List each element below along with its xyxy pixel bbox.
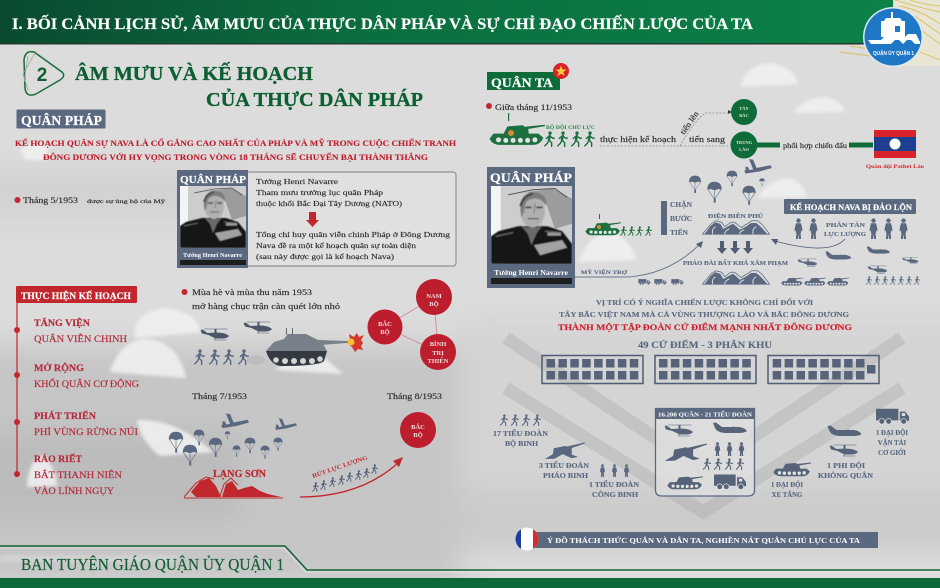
diagram: three target regions: BẮC <box>378 320 392 328</box>
arrow: withdrawal of forces: RÚT LỰC LƯỢNG <box>311 453 369 480</box>
icon: Vietnam flag <box>553 63 569 79</box>
banner: French intent: Ý ĐỒ THÁCH THỨC QUÂN VÀ DÂN TA, NGHIỀN NÁT QUÂN CHỦ LỰC CỦA TA <box>547 537 860 545</box>
block label: chặn bước tiến <box>661 201 692 237</box>
biography text: Nava đề ra một kế hoạch quân sự toàn diện <box>256 241 416 250</box>
logo: Quận ủy Quận 1 <box>840 0 940 67</box>
node: Tây Bắc: TÂY <box>739 106 749 111</box>
biography text <box>256 177 450 261</box>
unit: artillery: PHÁO BINH <box>543 472 589 480</box>
text: summer and autumn sweeps: mở hàng chục trận càn quét lớn nhỏ <box>192 301 340 311</box>
dates: July and August 1953: Tháng 8/1953 <box>387 392 442 401</box>
logo: Quận ủy Quận 1: QUẬN ỦY QUẬN 1 <box>873 50 914 57</box>
step: ráo riết <box>34 452 122 497</box>
arrow: down <box>306 212 319 227</box>
card: Navarre portrait <box>177 170 248 268</box>
step: tăng viện <box>34 316 127 345</box>
text: strategic position: TÂY BẮC VIỆT NAM MÀ CẢ VÙNG THƯỢNG LÀO VÀ BẮC ĐÔNG DƯƠNG <box>559 311 850 319</box>
illustration: Điện Biên Phủ: ĐIỆN BIÊN PHỦ <box>708 212 764 220</box>
unit: tanks <box>771 463 811 499</box>
arrow: US aid <box>575 241 703 285</box>
step: ráo riết: RÁO RIẾT <box>34 452 83 465</box>
red statement: Nava plan: KẾ HOẠCH QUÂN SỰ NAVA LÀ CỐ GẮNG CAO NHẤT CỦA PHÁP VÀ MỸ TRONG CUỘC CHIẾN TRANH <box>15 138 456 148</box>
biography text: Tham mưu trưởng lục quân Pháp <box>256 188 383 197</box>
node: Tây Bắc <box>731 99 757 125</box>
unit: engineers: CÔNG BINH <box>592 491 639 499</box>
unit: infantry <box>493 414 548 448</box>
date note: Tháng 5/1953: được sự ủng hộ của Mỹ <box>87 198 165 205</box>
unit: transport <box>876 409 909 457</box>
date note: Tháng 5/1953: Tháng 5/1953 <box>23 196 78 205</box>
diagram: three target regions: TRỊ <box>432 350 444 357</box>
section heading: 2 Âm mưu và kế hoạch: CỦA THỰC DÂN PHÁP <box>206 87 423 111</box>
heading: 49 strongholds: 49 CỨ ĐIỂM - 3 PHÂN KHU <box>638 338 772 351</box>
panel: garrison summary: 16.200 QUÂN - 21 TIỂU ĐOÀN <box>658 410 753 418</box>
label: Quân Pháp: QUÂN PHÁP <box>21 113 102 128</box>
unit: infantry: BỘ BINH <box>505 440 539 448</box>
footer: BAN TUYÊN GIÁO QUẬN ỦY QUẬN 1 <box>21 555 284 574</box>
diagram: three target regions: BỘ <box>380 328 390 336</box>
card: Navarre large portrait: QUÂN PHÁP <box>490 170 572 185</box>
header bar <box>0 0 940 66</box>
node: Tây Bắc: BẮC <box>739 112 749 118</box>
label: Quân ta with flag <box>487 63 569 90</box>
unit: air squadron: KHÔNG QUÂN <box>818 472 873 480</box>
unit: tanks: XE TĂNG <box>772 491 803 499</box>
date note: mid November 1953: Giữa tháng 11/1953 <box>495 103 572 112</box>
panel: garrison summary <box>655 408 755 496</box>
diagram: three target regions <box>368 279 456 370</box>
unit: air squadron <box>818 426 873 480</box>
diagram: three target regions: NAM <box>426 293 442 300</box>
step: tăng viện: TĂNG VIỆN <box>34 316 90 329</box>
card: Navarre portrait: QUÂN PHÁP <box>180 174 246 186</box>
arrow: US aid: MỸ VIỆN TRỢ <box>581 268 628 276</box>
card: Navarre large portrait <box>487 167 575 288</box>
icon: red mountains <box>184 477 283 498</box>
node: Trung Lào: LÀO <box>739 147 749 152</box>
biography text: Tổng chỉ huy quân viễn chinh Pháp ở Đông Dương <box>256 230 450 239</box>
illustration: impregnable fortress: PHÁO ĐÀI BẤT KHẢ XÂM PHẠM <box>683 259 788 267</box>
block label: chặn bước tiến: BƯỚC <box>670 215 692 223</box>
diagram: three target regions: THIÊN <box>428 357 449 365</box>
step: mở rộng <box>34 361 139 390</box>
illustration: Lạng Sơn paratroop drop <box>169 413 297 498</box>
step: phát triển <box>34 409 138 438</box>
arrow: withdrawal of forces <box>300 453 403 497</box>
unit: engineers <box>589 464 639 499</box>
unit: infantry: 17 TIỂU ĐOÀN <box>493 430 548 438</box>
panel: Navarre biography <box>177 170 456 268</box>
callout: Nava plan disrupted: LỰC LƯỢNG <box>824 231 866 238</box>
unit: tanks: 1 ĐẠI ĐỘI <box>771 481 803 489</box>
main force: tank and soldiers <box>490 113 595 146</box>
circle: Bắc Bộ August: BẮC <box>411 423 425 431</box>
diagram: three target regions: BỘ <box>429 300 439 308</box>
flow: main force deployment: tiến lên <box>678 110 701 136</box>
text: strategic position: VỊ TRÍ CÓ Ý NGHĨA CHIẾN LƯỢC KHÔNG CHỈ ĐỐI VỚI <box>596 299 813 307</box>
unit: artillery <box>539 442 589 480</box>
panel: thực hiện kế hoạch: THỰC HIỆN KẾ HOẠCH <box>21 289 132 302</box>
flow: main force deployment: phối hợp chiến đấu <box>783 142 848 150</box>
label: Quân ta with flag: QUÂN TA <box>491 75 554 90</box>
circle: Bắc Bộ August: BỘ <box>413 431 423 439</box>
biography text: Tướng Henri Navarre <box>256 177 339 186</box>
chevron background <box>506 338 902 512</box>
step: ráo riết: VÀO LÍNH NGỤY <box>34 485 114 497</box>
card: Navarre portrait: Tướng Henri Navarre <box>183 253 242 259</box>
step: phát triển: PHỈ VÙNG RỪNG NÚI <box>34 426 138 438</box>
unit: transport: VẬN TẢI <box>878 439 907 447</box>
node: Trung Lào <box>730 132 758 158</box>
icon: muzzle blast <box>346 333 364 352</box>
dates: July and August 1953: Tháng 7/1953 <box>192 392 247 401</box>
unit: air squadron: 1 PHI ĐỘI <box>827 462 865 470</box>
flow: main force deployment: tiến sang <box>689 134 726 144</box>
card: Navarre large portrait: Tướng Henri Navarre <box>494 269 568 277</box>
dates: July and August 1953 <box>192 392 442 401</box>
arrows: down to fortress <box>717 241 753 254</box>
section heading: 2 Âm mưu và kế hoạch: ÂM MƯU VÀ KẾ HOẠCH <box>75 61 313 85</box>
date note: Tháng 5/1953 <box>14 196 165 205</box>
icon: number triangle <box>23 51 64 95</box>
flow: main force deployment <box>600 99 873 158</box>
step: mở rộng: KHỐI QUÂN CƠ ĐỘNG <box>34 377 139 390</box>
callout: Nava plan disrupted <box>784 199 916 239</box>
text: summer and autumn sweeps <box>182 287 340 311</box>
unit: artillery: 3 TIỂU ĐOÀN <box>539 462 589 470</box>
icon: France flag <box>516 528 538 550</box>
flag: Laos Pathet Lào: Quân đội Pathet Lào <box>866 165 925 170</box>
illustration: impregnable fortress <box>683 259 788 284</box>
illustration: Lạng Sơn paratroop drop: LẠNG SƠN <box>213 469 266 480</box>
icon: number triangle: 2 <box>37 65 47 86</box>
step: tăng viện: QUÂN VIỄN CHINH <box>34 332 127 345</box>
callout: Nava plan disrupted: KẾ HOẠCH NAVA BỊ ĐẢO LỘN <box>790 202 912 212</box>
diagram: three target regions: BÌNH <box>430 340 446 348</box>
arrow: disperse back <box>771 239 845 248</box>
text: summer and autumn sweeps: Mùa hè và mùa thu năm 1953 <box>192 287 312 297</box>
node: Trung Lào: TRUNG <box>736 140 753 145</box>
block label: chặn bước tiến: TIẾN <box>670 229 688 237</box>
main force: tank and soldiers: BỘ ĐỘI CHỦ LỰC <box>546 125 595 131</box>
callout: Nava plan disrupted: PHÂN TÁN <box>826 221 865 229</box>
unit: transport: 1 ĐẠI ĐỘI <box>876 429 908 437</box>
flag: Laos Pathet Lào <box>866 130 925 170</box>
block label: chặn bước tiến: CHẶN <box>670 201 692 209</box>
text: strategic position: THÀNH MỘT TẬP ĐOÀN CỨ ĐIỂM MẠNH NHẤT ĐÔNG DƯƠNG <box>558 322 852 332</box>
biography text: (sau này được gọi là kế hoạch Nava) <box>256 252 395 261</box>
force: small green tank and soldiers <box>585 214 652 236</box>
text: strategic position <box>558 299 852 332</box>
unit: engineers: 1 TIỂU ĐOÀN <box>589 481 639 489</box>
step: ráo riết: BẮT THANH NIÊN <box>34 468 122 481</box>
illustration: Điện Biên Phủ <box>689 159 772 234</box>
banner: French intent <box>516 528 878 550</box>
footer <box>0 546 940 588</box>
red statement: Nava plan: ĐÔNG DƯƠNG VỚI HY VỌNG TRONG VÒNG 18 THÁNG SẼ CHUYỂN BẠI THÀNH THẮNG <box>43 152 428 162</box>
red statement: Nava plan <box>15 138 456 162</box>
circle: Bắc Bộ August <box>400 412 436 448</box>
US aid equipment <box>781 246 920 286</box>
step: mở rộng: MỞ RỘNG <box>34 361 85 374</box>
illustration: sweep forces <box>195 322 364 366</box>
section heading: 2 Âm mưu và kế hoạch <box>23 51 423 111</box>
unit: transport: CƠ GIỚI <box>878 449 906 457</box>
header title: I. BỐI CẢNH LỊCH SỬ, ÂM MƯU CỦA THỰC DÂN PHÁP VÀ SỰ CHỈ ĐẠO CHIẾN LƯỢC CỦA TA <box>12 13 753 33</box>
panel: thực hiện kế hoạch <box>14 286 139 497</box>
step: phát triển: PHÁT TRIỂN <box>34 409 96 422</box>
flow: main force deployment: thực hiện kế hoạch <box>600 134 677 144</box>
strongholds grid <box>542 356 879 384</box>
biography text: thuộc khối Bắc Đại Tây Dương (NATO) <box>256 199 403 208</box>
